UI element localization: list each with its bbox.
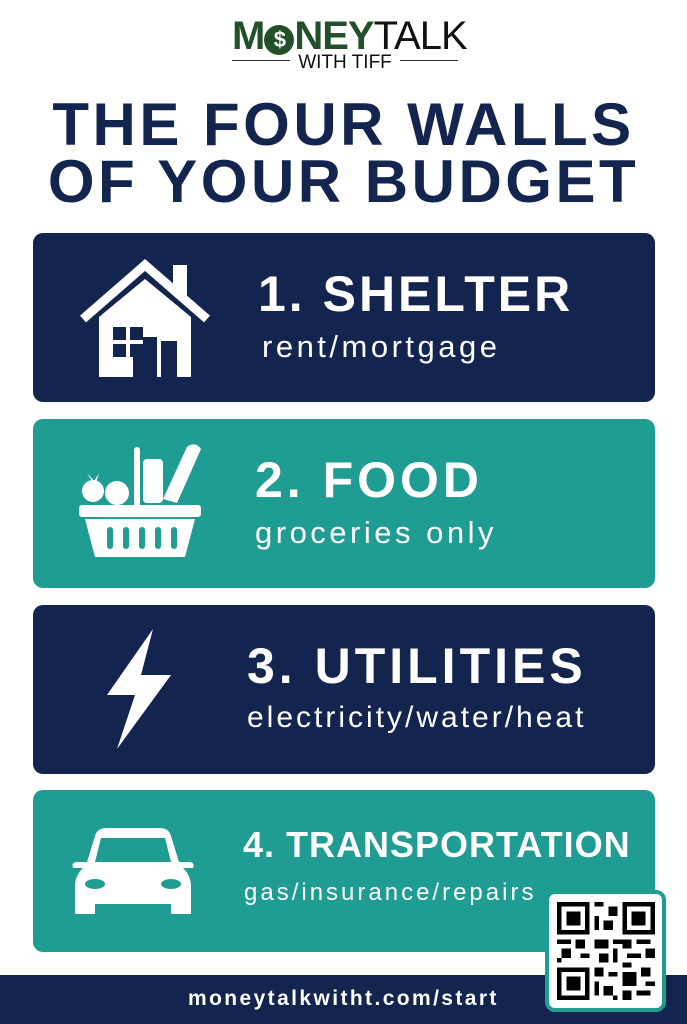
title: [48, 91, 639, 215]
footer url: moneytalkwitht.com/start: [188, 987, 499, 1010]
subtitle: rent/mortgage: [262, 329, 500, 364]
icon: house: [80, 259, 210, 377]
logo wordmark: M NEYTALK: [232, 14, 467, 58]
heading: 1. SHELTER: [258, 266, 573, 322]
panel: shelter: [33, 233, 655, 402]
title: THE FOUR WALLS: [52, 91, 635, 158]
heading: 2. FOOD: [255, 452, 483, 508]
footer bar: [0, 975, 687, 1024]
logo wordmark: $: [274, 27, 285, 52]
panel: food: [33, 419, 655, 588]
subtitle: electricity/water/heat: [247, 701, 586, 734]
heading: 4. TRANSPORTATION: [243, 824, 631, 865]
title: OF YOUR BUDGET: [48, 148, 639, 215]
subtitle: gas/insurance/repairs: [244, 879, 536, 906]
icon: lightning bolt: [107, 629, 171, 749]
subtitle: groceries only: [255, 515, 497, 550]
logo subtitle: WITH TIFF: [298, 52, 392, 73]
heading: 3. UTILITIES: [247, 638, 587, 694]
icon: grocery basket: [79, 444, 201, 557]
QR code: [545, 890, 666, 1012]
panel: transportation: [33, 790, 655, 952]
logo: [232, 14, 468, 73]
icon: car: [72, 828, 194, 914]
panel: utilities: [33, 605, 655, 774]
